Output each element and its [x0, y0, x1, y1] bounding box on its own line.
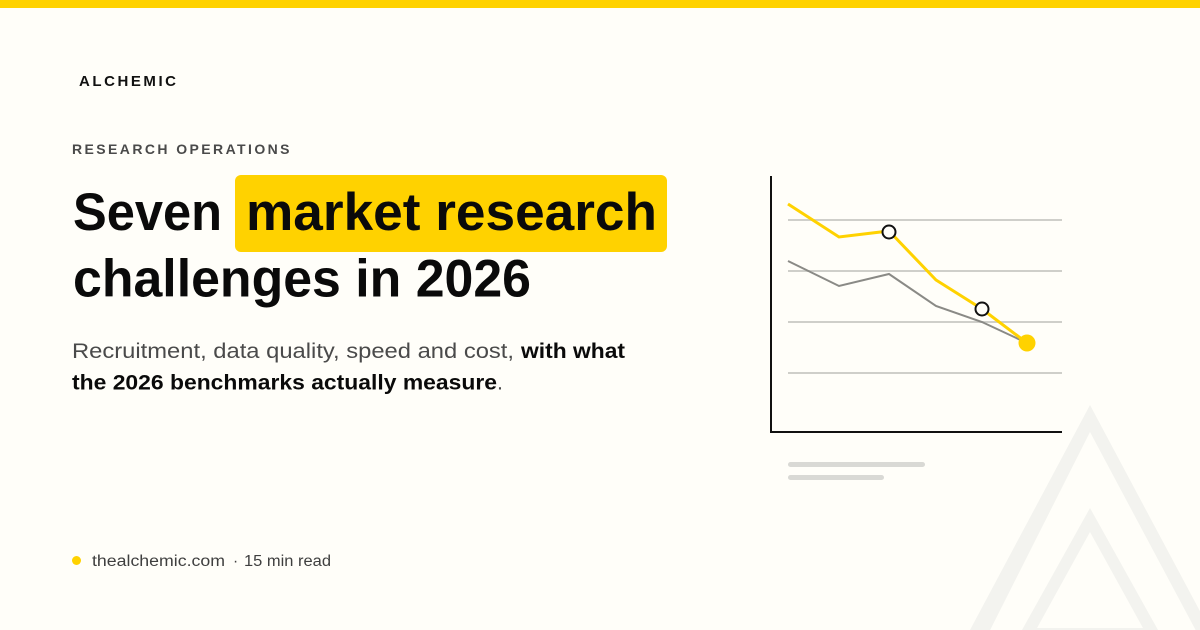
subtitle period: . — [497, 370, 503, 394]
watermark: triangles — [970, 405, 1200, 630]
title second line: challenges in 2026 — [73, 250, 531, 308]
brand logo text: ALCHEMIC — [79, 73, 176, 90]
line chart — [771, 176, 1062, 432]
eyebrow label: RESEARCH OPERATIONS — [72, 141, 290, 157]
footer dot — [72, 556, 81, 565]
end point marker — [1018, 334, 1036, 352]
chart axes — [771, 176, 1062, 432]
grey series line — [788, 261, 1027, 343]
chart grid lines — [788, 220, 1062, 373]
title highlight: market research — [246, 183, 657, 242]
subtitle bold second line: the 2026 benchmarks actually measure — [72, 370, 497, 394]
marker one — [882, 226, 896, 238]
footer separator: · — [233, 553, 238, 570]
subtitle bold first line: with what — [520, 339, 625, 363]
title — [73, 175, 667, 308]
yellow series line — [788, 204, 1027, 343]
placeholder caption bars — [788, 462, 925, 480]
top accent bar — [0, 0, 1200, 8]
subtitle regular text: Recruitment, data quality, speed and cost, — [72, 339, 514, 363]
footer site text: thealchemic.com — [92, 553, 225, 570]
marker two — [976, 302, 988, 316]
subtitle — [72, 339, 625, 394]
footer read time: 15 min read — [244, 553, 331, 570]
title word: Seven: Seven — [73, 183, 222, 242]
footer — [72, 553, 331, 570]
